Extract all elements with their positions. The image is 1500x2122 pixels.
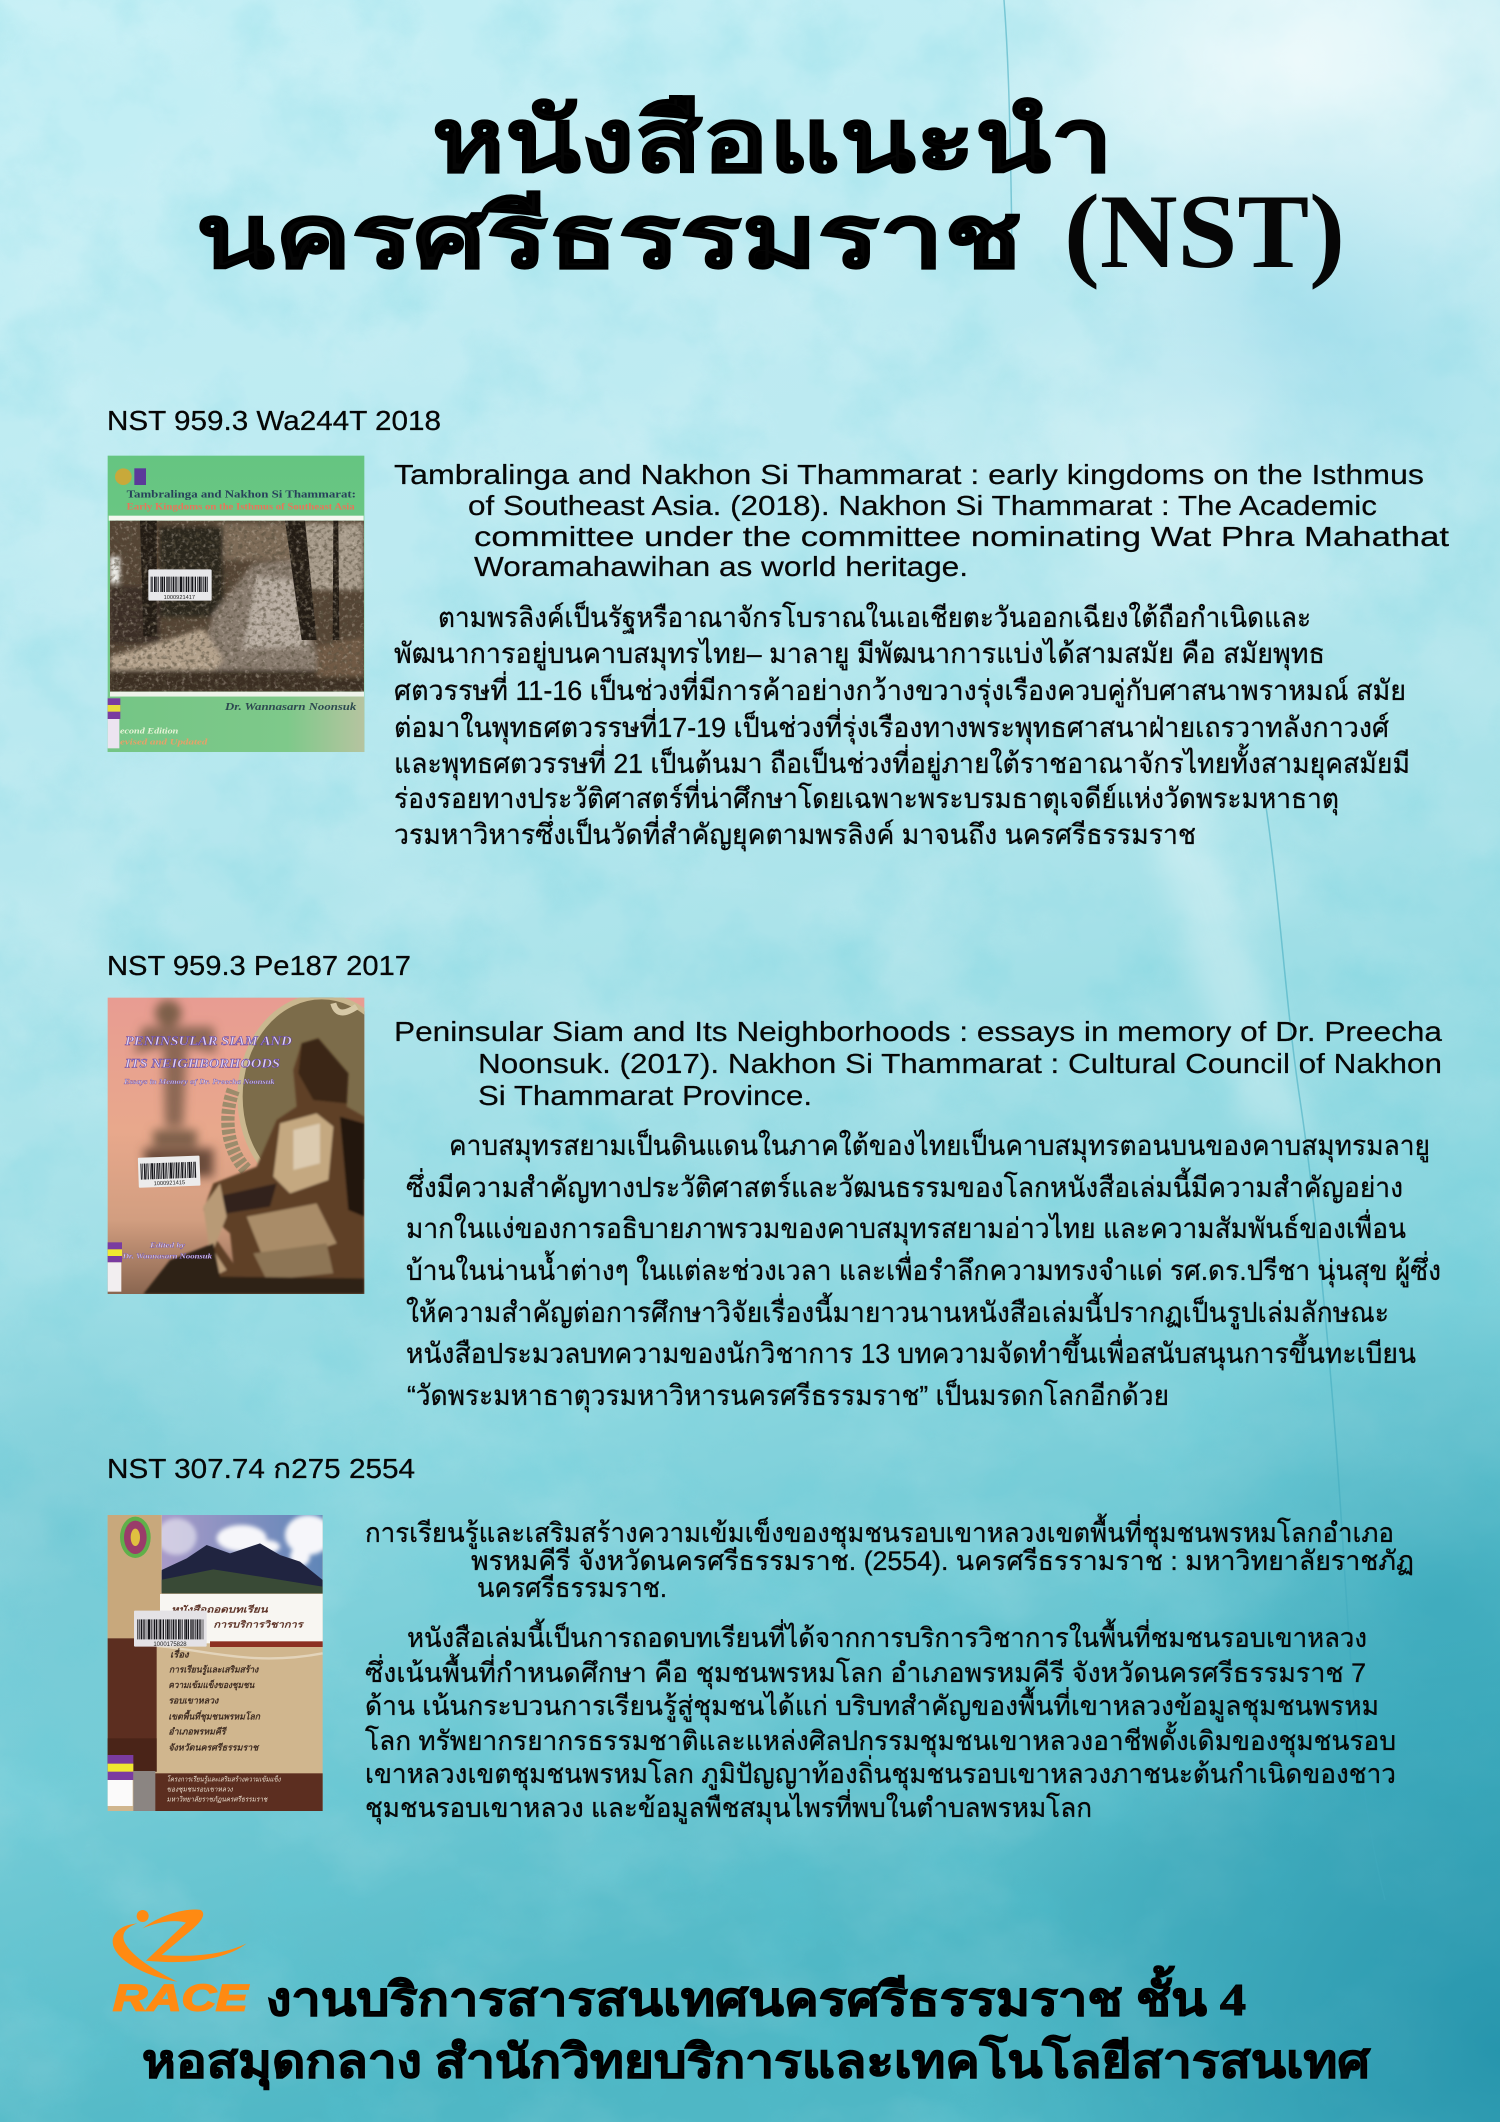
book cover 2: 1000921415 bbox=[154, 1180, 185, 1187]
book cover 2: PENINSULAR SIAM AND bbox=[125, 1034, 292, 1048]
description 1: วรมหาวิหารซึ่งเป็นวัดที่สำคัญยุคตามพรลิงค์ มาจนถึง นครศรีธรรมราช bbox=[394, 815, 1196, 852]
book cover 3 bbox=[108, 1515, 332, 1811]
icon: RACE logo: RACE bbox=[113, 1977, 250, 2018]
description 3: ซึ่งเน้นพื้นที่กำหนดศึกษา คือ ชุมชนพรหมโลก อำเภอพรหมคีรี จังหวัดนครศรีธรรมราช 7 bbox=[365, 1653, 1366, 1690]
book cover 2: Essays in Memory of Dr. Preecha Noonsuk bbox=[123, 1078, 275, 1086]
citation 2: Peninsular Siam and Its Neighborhoods : essays in memory of Dr. Preecha bbox=[394, 1016, 1442, 1047]
citation 1 bbox=[394, 459, 1449, 582]
description 1: ร่องรอยทางประวัติศาสตร์ที่น่าศึกษาโดยเฉพาะพระบรมธาตุเจดีย์แห่งวัดพระมหาธาตุ bbox=[394, 779, 1339, 816]
section 2: Peninsular Siam book bbox=[107, 950, 1442, 1413]
description 2 bbox=[406, 1128, 1441, 1413]
title: หนังสือแนะนำ bbox=[432, 94, 1113, 191]
call number 1: NST 959.3 Wa244T 2018 bbox=[107, 405, 441, 436]
book cover 2: ITS NEIGHBORHOODS bbox=[124, 1056, 280, 1070]
description 3: โลก ทรัพยากรยากรธรรมชาติและแหล่งศิลปกรรมชุมชนเขาหลวงอาชีพดั้งเดิมของชุมชนรอบ bbox=[365, 1721, 1396, 1758]
footer text: งานบริการสารสนเทศนครศรีธรรมราช ชั้น 4 bbox=[266, 1965, 1246, 2025]
description 2: ให้ความสำคัญต่อการศึกษาวิจัยเรื่องนี้มายาวนานหนังสือเล่มนี้ปรากฏเป็นรูปเล่มลักษณะ bbox=[406, 1292, 1389, 1330]
description 2: บ้านในน่านน้ำต่างๆ ในแต่ละช่วงเวลา และเพื่อรำลึกความทรงจำแด่ รศ.ดร.ปรีชา นุ่นสุข ผู้ซึ่ง bbox=[406, 1250, 1441, 1288]
call number 3: NST 307.74 ก275 2554 bbox=[107, 1453, 415, 1484]
book cover 3: เขตพื้นที่ชุมชนพรหมโลก bbox=[168, 1709, 261, 1722]
book cover 3: 1000175828 bbox=[153, 1642, 187, 1648]
citation 1: Tambralinga and Nakhon Si Thammarat : early kingdoms on the Isthmus bbox=[394, 459, 1424, 490]
citation 3: นครศรีธรรมราช. bbox=[477, 1573, 667, 1603]
citation 1: committee under the committee nominating Wat Phra Mahathat bbox=[474, 521, 1449, 552]
book cover 1: Dr. Wannasarn Noonsuk bbox=[224, 702, 357, 713]
description 3: หนังสือเล่มนี้เป็นการถอดบทเรียนที่ได้จากการบริการวิชาการในพื้นที่ชมชนรอบเขาหลวง bbox=[407, 1618, 1367, 1653]
description 1: ต่อมาในพุทธศตวรรษที่17-19 เป็นช่วงที่รุ่งเรืองทางพระพุทธศาสนาฝ่ายเถรวาทลังกาวงศ์ bbox=[394, 708, 1389, 745]
book cover 3: อำเภอพรหมคีรี bbox=[168, 1727, 228, 1737]
description 2: หนังสือประมวลบทความของนักวิชาการ 13 บทความจัดทำขึ้นเพื่อสนับสนุนการขึ้นทะเบียน bbox=[406, 1333, 1416, 1371]
book cover 3: รอบเขาหลวง bbox=[168, 1696, 219, 1706]
description 1: ตามพรลิงค์เป็นรัฐหรือาณาจักรโบราณในเอเชียตะวันออกเฉียงใต้ถือกำเนิดและ bbox=[438, 600, 1311, 634]
footer text: หอสมุดกลาง สำนักวิทยบริการและเทคโนโลยีสารสนเทศ bbox=[142, 2034, 1371, 2090]
citation 2 bbox=[394, 1016, 1442, 1111]
footer text bbox=[142, 1965, 1371, 2090]
book cover 2 bbox=[108, 998, 364, 1294]
book cover 1: 1000921417 bbox=[164, 595, 195, 601]
book cover 1: econd Edition bbox=[120, 726, 179, 735]
book cover 3: หนังสือถอดบทเรียน bbox=[171, 1604, 268, 1615]
section 1: Tambralinga book bbox=[107, 405, 1449, 852]
book cover 1: Early Kingdoms on the Isthmus of Southeast Asia bbox=[127, 501, 355, 511]
citation 1: of Southeast Asia. (2018). Nakhon Si Thammarat : The Academic bbox=[468, 490, 1377, 521]
description 1: ศตวรรษที่ 11-16 เป็นช่วงที่มีการค้าอย่างกว้างขวางรุ่งเรืองควบคู่กับศาสนาพราหมณ์ สมัย bbox=[394, 671, 1406, 708]
description 1 bbox=[394, 600, 1410, 852]
book cover 2: Edited by bbox=[149, 1240, 186, 1249]
book cover 2: Dr. Wannasarn Noonsuk bbox=[121, 1251, 212, 1260]
book cover 3: ความเข้มแข็งของชุมชน bbox=[168, 1679, 255, 1691]
book cover 3: เรื่อง bbox=[170, 1647, 189, 1659]
book cover 3: การบริการวิชาการ bbox=[213, 1619, 305, 1629]
description 1: และพุทธศตวรรษที่ 21 เป็นต้นมา ถือเป็นช่วงที่อยู่ภายใต้ราชอาณาจักรไทยทั้งสามยุคสมัยมี bbox=[394, 743, 1410, 781]
description 2: ซึ่งมีความสำคัญทางประวัติศาสตร์และวัฒนธรรมของโลกหนังสือเล่มนี้มีความสำคัญอย่าง bbox=[406, 1167, 1403, 1203]
icon: RACE logo bbox=[113, 1909, 250, 2018]
section 3: Khao Luang community book bbox=[107, 1453, 1414, 1825]
description 2: คาบสมุทรสยามเป็นดินแดนในภาคใต้ของไทยเป็นคาบสมุทรตอนบนของคาบสมุทรมลายู bbox=[449, 1128, 1430, 1163]
book cover 3: มหาวิทยาลัยราชภัฏนครศรีธรรมราช bbox=[167, 1795, 268, 1803]
title bbox=[196, 94, 1345, 290]
citation 3: พรหมคีรี จังหวัดนครศรีธรรมราช. (2554). นครศรีธรรามราช : มหาวิทยาลัยราชภัฏ bbox=[471, 1546, 1414, 1576]
title: นครศรีธรรมราช bbox=[196, 190, 1022, 287]
citation 3 bbox=[365, 1513, 1414, 1603]
book cover 3: การเรียนรู้และเสริมสร้าง bbox=[169, 1664, 259, 1675]
description 2: มากในแง่ของการอธิบายภาพรวมของคาบสมุทรสยามอ่าวไทย และความสัมพันธ์ของเพื่อน bbox=[406, 1209, 1406, 1246]
title: (NST) bbox=[1064, 173, 1345, 290]
book cover 3: ของชุมชนรอบเขาหลวง bbox=[167, 1786, 233, 1793]
description 2: “วัดพระมหาธาตุวรมหาวิหารนครศรีธรรมราช” เป็นมรดกโลกอีกด้วย bbox=[407, 1378, 1169, 1413]
description 3: เขาหลวงเขตชุมชนพรหมโลก ภูมิปัญญาท้องถิ่นชุมชนรอบเขาหลวงภาชนะต้นกำเนิดของชาว bbox=[365, 1755, 1396, 1791]
citation 1: Woramahawihan as world heritage. bbox=[474, 551, 968, 582]
citation 2: Noonsuk. (2017). Nakhon Si Thammarat : Cultural Council of Nakhon bbox=[478, 1048, 1442, 1079]
citation 3: การเรียนรู้และเสริมสร้างความเข้มเข็งของชุมชนรอบเขาหลวงเขตพื้นที่ชุมชนพรหมโลกอำเภอ bbox=[365, 1513, 1394, 1550]
description 3: ด้าน เน้นกระบวนการเรียนรู้สู่ชุมชนได้แก่ บริบทสำคัญของพื้นที่เขาหลวงข้อมูลชุมชนพรหม bbox=[365, 1686, 1379, 1723]
book cover 1: evised and Updated bbox=[120, 737, 209, 746]
book cover 3: โครงการเรียนรู้และเสริมสร้างความเข้มแข็ง bbox=[167, 1775, 281, 1784]
book cover 3: จังหวัดนครศรีธรรมราช bbox=[168, 1742, 260, 1752]
book cover 1 bbox=[108, 456, 364, 752]
book cover 1: Tambralinga and Nakhon Si Thammarat: bbox=[127, 488, 356, 500]
description 3: ชุมชนรอบเขาหลวง และข้อมูลพืชสมุนไพรที่พบในตำบลพรหมโลก bbox=[365, 1789, 1092, 1825]
citation 2: Si Thammarat Province. bbox=[478, 1080, 812, 1111]
description 1: พัฒนาการอยู่บนคาบสมุทรไทย– มาลายู มีพัฒนาการแบ่งได้สามสมัย คือ สมัยพุทธ bbox=[394, 638, 1325, 671]
call number 2: NST 959.3 Pe187 2017 bbox=[107, 950, 411, 981]
description 3 bbox=[365, 1618, 1396, 1825]
